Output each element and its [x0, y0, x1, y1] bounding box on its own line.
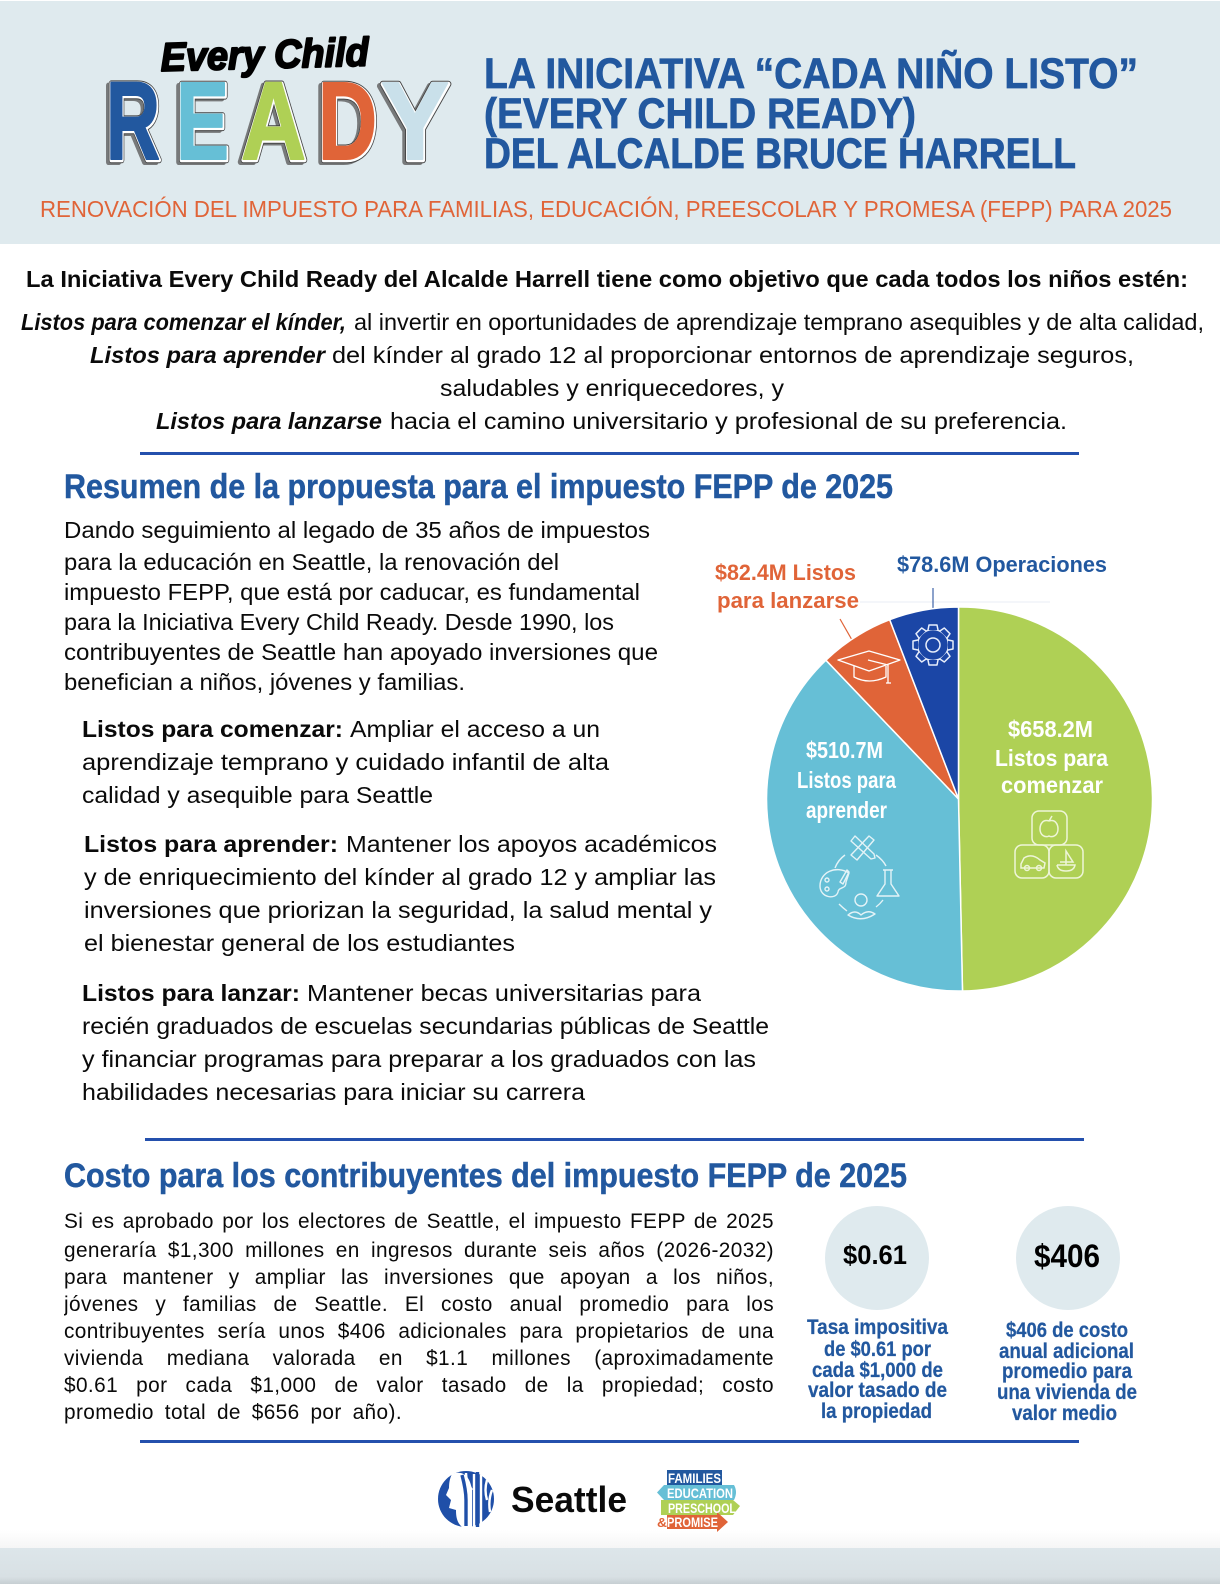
label: listos para comenzar	[995, 716, 1108, 798]
title	[484, 50, 1138, 178]
panel: header band	[0, 1, 1220, 244]
slice: operaciones	[890, 607, 958, 799]
summary paragraph: Dando seguimiento al legado de 35 años de impuestos	[64, 517, 650, 543]
logo: City of Seattle	[438, 1471, 627, 1527]
FEPP logo bars	[657, 1470, 740, 1532]
icon: gear	[913, 625, 953, 665]
label: listos para comenzar: $658.2M	[1008, 716, 1093, 742]
heading: costo: Costo para los contribuyentes del impuesto FEPP de 2025	[64, 1157, 907, 1195]
logo wordmark: Every Child: Every Child	[160, 31, 371, 80]
logo letters: READY: A	[241, 61, 307, 184]
logo letters: READY: A	[238, 63, 304, 186]
summary paragraph: contribuyentes de Seattle han apoyado inversiones que	[64, 639, 658, 665]
text block: listos para lanzar: Mantener becas universitarias para	[307, 980, 701, 1006]
intro line: listos para comenzar: al invertir en oportunidades de aprendizaje temprano asequibles y de alta calidad,	[354, 309, 1204, 335]
stat circle: $406: $406	[1034, 1238, 1100, 1274]
intro lines: listos para aprender	[90, 342, 1134, 401]
stat caption: tasa impositiva: valor tasado de	[808, 1379, 947, 1402]
slice: listos para aprender	[767, 660, 962, 991]
text block: listos para aprender	[84, 831, 717, 956]
text block: listos para aprender: Mantener los apoyos académicos	[346, 831, 717, 857]
logo: FEPP: PROMISE	[667, 1515, 718, 1530]
intro text block	[21, 266, 1204, 434]
stat circle: $0.61	[825, 1206, 929, 1310]
logo: FEPP: FAMILIES	[668, 1471, 721, 1486]
logo: FEPP: &	[657, 1515, 667, 1530]
summary paragraph: para la Iniciativa Every Child Ready. Desde 1990, los	[64, 609, 614, 635]
leader lines and faint guide	[840, 588, 1050, 640]
intro line: listos para comenzar: Listos para comenzar el kínder,	[21, 309, 346, 335]
label: listos para aprender: $510.7M	[806, 737, 883, 763]
label: listos para lanzarse: $82.4M Listos	[715, 560, 856, 585]
seal	[438, 1471, 494, 1527]
logo letters: READY: D	[318, 61, 378, 184]
logo letters: READY: D	[315, 63, 375, 186]
stat circle: $0.61: $0.61	[843, 1240, 907, 1270]
text block: listos para aprender: Listos para aprender:	[84, 831, 338, 857]
icon: learning cycle	[820, 836, 899, 919]
cost paragraph	[64, 1205, 776, 1430]
stat caption: costo anual: promedio para	[1002, 1360, 1132, 1383]
subtitle: RENOVACIÓN DEL IMPUESTO PARA FAMILIAS, EDUCACIÓN, PREESCOLAR Y PROMESA (FEPP) PARA 2025	[40, 196, 1172, 222]
logo letters: READY: A	[241, 61, 307, 184]
logo letters: READY: R	[106, 61, 161, 184]
slice: listos para comenzar	[958, 607, 1153, 991]
footer band	[0, 1530, 1220, 1584]
intro heading: La Iniciativa Every Child Ready del Alcalde Harrell tiene como objetivo que cada todos los niños estén:	[26, 266, 1188, 292]
stat caption: costo anual	[997, 1319, 1137, 1425]
text block: listos para comenzar: aprendizaje temprano y cuidado infantil de alta	[82, 749, 609, 775]
stat: tax rate	[807, 1206, 948, 1423]
cost paragraph: jóvenes y familias de Seattle. El costo anual promedio para los	[64, 1293, 774, 1316]
text block: listos para lanzar: Listos para lanzar:	[82, 980, 300, 1006]
cost paragraph: vivienda mediana valorada en $1.1 millones (aproximadamente	[64, 1347, 774, 1370]
cost paragraph: generaría $1,300 millones en ingresos durante seis años (2026-2032)	[64, 1239, 774, 1262]
label: operaciones: $78.6M Operaciones	[897, 552, 1107, 577]
logo: FEPP: PRESCHOOL	[668, 1501, 736, 1516]
logo letters: READY: A	[241, 60, 306, 183]
summary paragraph	[64, 517, 658, 695]
stat caption: tasa impositiva: la propiedad	[821, 1400, 932, 1423]
stat caption: tasa impositiva: cada $1,000 de	[812, 1359, 943, 1382]
text block: listos para lanzar	[82, 980, 769, 1105]
chart: pie of budget allocation	[715, 552, 1153, 991]
label: listos para comenzar: comenzar	[1001, 772, 1103, 798]
logo letters: READY: R	[103, 63, 158, 186]
stat caption: tasa impositiva	[807, 1316, 948, 1423]
logo: FEPP	[657, 1470, 740, 1532]
logo letters: READY	[103, 60, 450, 186]
logo letters: READY: D	[318, 61, 378, 184]
logo letters: READY: Y	[381, 60, 449, 183]
slice: listos para lanzarse	[826, 620, 958, 799]
stat caption: costo anual: una vivienda de	[997, 1381, 1137, 1404]
text block: listos para lanzar: habilidades necesarias para iniciar su carrera	[82, 1079, 585, 1105]
title: DEL ALCALDE BRUCE HARRELL	[484, 130, 1076, 178]
logo letters: READY: R	[106, 60, 160, 183]
label: listos para lanzarse: para lanzarse	[717, 588, 859, 613]
intro lines: listos para aprender: saludables y enriquecedores, y	[440, 375, 785, 401]
stat caption: tasa impositiva: Tasa impositiva	[807, 1316, 948, 1339]
intro line: listos para lanzarse: hacia el camino universitario y profesional de su preferencia.	[390, 408, 1067, 434]
logo letters: READY: Y	[381, 61, 450, 184]
icon: graduation cap	[838, 651, 900, 683]
stat caption: costo anual: anual adicional	[999, 1340, 1134, 1363]
logo letters: READY: Y	[381, 61, 450, 184]
logo letters: READY: Y	[378, 63, 447, 186]
intro lines: listos para aprender: Listos para aprender	[90, 342, 326, 368]
stat caption: costo anual: $406 de costo	[1006, 1319, 1128, 1342]
logo letters: READY: D	[318, 60, 377, 183]
logo letters: READY: R	[106, 61, 161, 184]
logo letters: READY: E	[176, 61, 230, 184]
summary paragraph: benefician a niños, jóvenes y familias.	[64, 669, 465, 695]
text block: listos para aprender: inversiones que priorizan la seguridad, la salud mental y	[84, 897, 713, 923]
cost paragraph: para mantener y ampliar las inversiones que apoyan a los niños,	[64, 1266, 774, 1289]
text block: listos para comenzar	[82, 716, 609, 808]
label: listos para aprender	[797, 737, 896, 823]
text block: listos para comenzar: Listos para comenzar:	[82, 716, 343, 742]
stat caption: tasa impositiva: de $0.61 por	[824, 1338, 931, 1361]
text block: listos para comenzar: Ampliar el acceso a un	[350, 716, 600, 742]
title: (EVERY CHILD READY)	[484, 90, 916, 138]
summary paragraph: impuesto FEPP, que está por caducar, es fundamental	[64, 579, 640, 605]
summary paragraph: para la educación en Seattle, la renovación del	[64, 549, 559, 575]
cost paragraph: $0.61 por cada $1,000 de valor tasado de la propiedad; costo	[64, 1374, 774, 1397]
logo: FEPP: EDUCATION	[667, 1486, 733, 1501]
heading: resumen: Resumen de la propuesta para el impuesto FEPP de 2025	[64, 468, 893, 506]
intro line: listos para lanzarse: Listos para lanzarse	[156, 408, 382, 434]
intro line: listos para lanzarse	[156, 408, 1067, 434]
intro lines: listos para aprender: del kínder al grado 12 al proporcionar entornos de aprendizaje seguros,	[332, 342, 1134, 368]
cost paragraph: contribuyentes sería unos $406 adicionales para propietarios de una	[64, 1320, 774, 1343]
label: listos para aprender: Listos para	[797, 767, 896, 793]
text block: listos para lanzar: y financiar programas para preparar a los graduados con las	[82, 1046, 756, 1072]
label: listos para lanzarse	[715, 560, 859, 613]
icon: toy blocks	[1015, 811, 1083, 878]
label: listos para aprender: aprender	[806, 797, 887, 823]
logo letters: READY: E	[176, 60, 229, 183]
text block: listos para lanzar: recién graduados de escuelas secundarias públicas de Seattle	[82, 1013, 769, 1039]
text block: listos para aprender: y de enriquecimiento del kínder al grado 12 y ampliar las	[84, 864, 716, 890]
logo letters: READY: E	[173, 63, 227, 186]
cost paragraph: promedio total de $656 por año).	[64, 1401, 402, 1424]
label: listos para comenzar: Listos para	[995, 745, 1108, 771]
wordmark: Seattle	[511, 1479, 627, 1520]
title: LA INICIATIVA “CADA NIÑO LISTO”	[484, 50, 1138, 98]
logo letters: READY: E	[176, 61, 230, 184]
stat caption: costo anual: valor medio	[1012, 1402, 1117, 1425]
text block: listos para aprender: el bienestar general de los estudiantes	[84, 930, 515, 956]
stat circle: $406	[1016, 1206, 1120, 1310]
text block: listos para comenzar: calidad y asequible para Seattle	[82, 782, 433, 808]
logo: Every Child Ready	[103, 31, 450, 186]
stat: annual cost	[997, 1206, 1137, 1425]
cost paragraph: Si es aprobado por los electores de Seattle, el impuesto FEPP de 2025	[64, 1210, 774, 1233]
